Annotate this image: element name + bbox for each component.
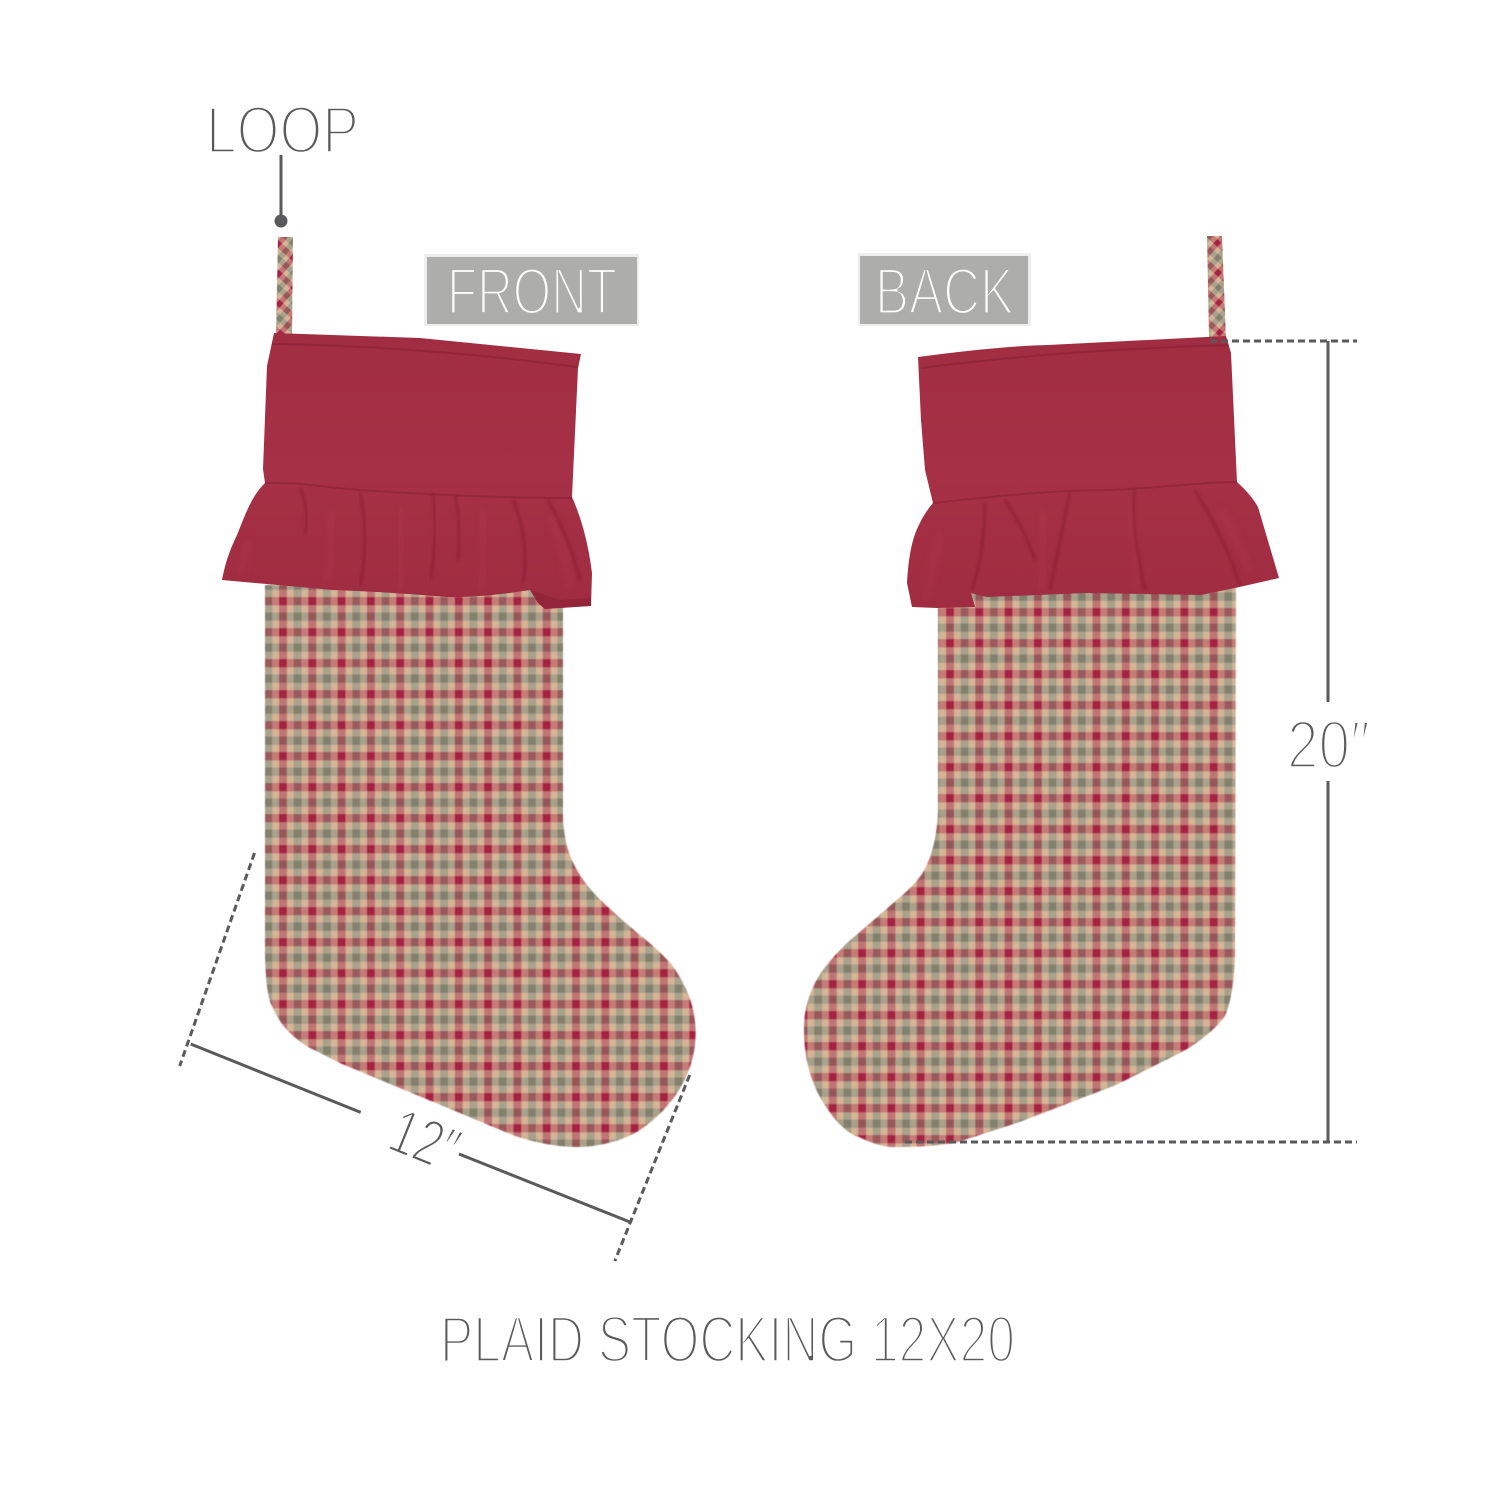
back red ruffled cuff bbox=[907, 336, 1279, 608]
label: front: FRONT bbox=[447, 254, 617, 328]
stocking: front bbox=[222, 237, 696, 1147]
back plaid body bbox=[804, 585, 1236, 1147]
callout: loop bbox=[206, 93, 359, 228]
front plaid body bbox=[265, 585, 696, 1147]
back hanging loop bbox=[1207, 236, 1226, 338]
stocking: back bbox=[804, 236, 1279, 1147]
front hanging loop bbox=[276, 237, 293, 335]
12 inch label: 12″ bbox=[380, 1094, 470, 1186]
label: back: BACK bbox=[875, 254, 1014, 328]
dimension: 12 inch width bbox=[180, 853, 690, 1261]
front red ruffled cuff bbox=[222, 333, 592, 609]
loop label: LOOP bbox=[206, 93, 359, 168]
20 inch label: 20″ bbox=[1287, 707, 1370, 783]
loop leader line with dot bbox=[274, 155, 288, 228]
title: PLAID STOCKING 12X20 bbox=[440, 1302, 1015, 1376]
